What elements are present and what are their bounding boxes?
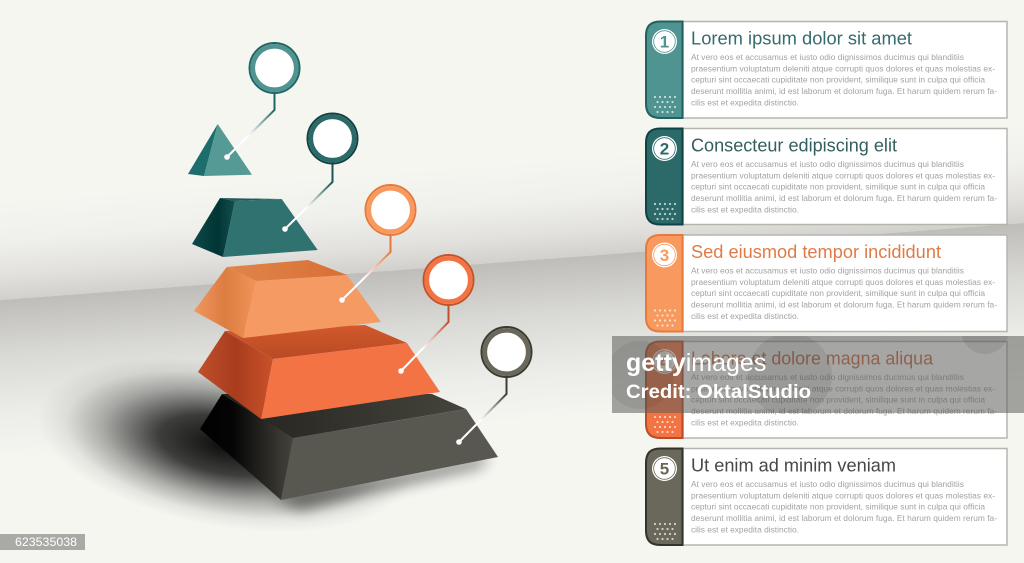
number badge 5	[652, 456, 677, 481]
heading 2: Consecteur edipiscing elit	[691, 136, 897, 156]
dots 2	[654, 203, 676, 220]
body text 4	[691, 372, 997, 428]
number badge 4: 4	[660, 352, 670, 372]
card 4	[646, 342, 1007, 438]
dots 4	[654, 416, 676, 433]
heading 1: Lorem ipsum dolor sit amet	[691, 28, 912, 48]
card 1	[646, 22, 1007, 118]
watermark band	[612, 336, 1024, 413]
number badge 2	[652, 136, 677, 161]
number badge 3	[652, 242, 677, 268]
tier 1: teal apex	[188, 124, 252, 176]
number badge 5: 5	[660, 460, 669, 478]
tab 5	[646, 448, 682, 545]
watermark logo: gettyimages	[626, 349, 766, 377]
number badge 4	[652, 349, 677, 374]
body text 2	[691, 159, 997, 215]
number badge 2: 2	[660, 140, 669, 158]
dots 5	[654, 523, 676, 540]
card 5	[646, 448, 1007, 545]
card 2	[646, 128, 1007, 224]
tab 4	[646, 342, 682, 438]
callout pin 4	[398, 255, 474, 374]
number badge 1	[652, 29, 677, 54]
number badge 1: 1	[660, 32, 669, 52]
dots 1	[654, 96, 676, 113]
callout pin 5	[456, 327, 532, 445]
body text 3	[691, 266, 997, 321]
tier 4: red orange	[198, 325, 440, 419]
watermark credit: Credit: OktalStudio	[626, 382, 811, 403]
dots 3	[654, 309, 676, 327]
image id tag: 623535038	[15, 537, 77, 549]
heading 5: Ut enim ad minim veniam	[691, 456, 896, 476]
heading 4: Labore et dolore magna aliqua	[691, 348, 934, 368]
card 3	[646, 235, 1007, 332]
heading 3: Sed eiusmod tempor incididunt	[691, 242, 941, 262]
callout pin 2	[282, 114, 358, 232]
callout pin 3	[339, 185, 416, 303]
body text 1	[691, 52, 997, 108]
image id tag	[0, 534, 85, 550]
pyramid shadow	[24, 331, 490, 559]
tier 5: dark grey	[200, 394, 498, 500]
pyramid	[188, 124, 498, 500]
tab 3	[646, 235, 682, 332]
number badge 3: 3	[660, 246, 669, 265]
tab 2	[646, 128, 682, 224]
tier 3: light orange	[194, 260, 381, 338]
tier 2: dark teal	[192, 198, 318, 257]
tab 1	[646, 22, 682, 118]
body text 5	[691, 479, 997, 535]
callout pin 1	[224, 43, 300, 160]
